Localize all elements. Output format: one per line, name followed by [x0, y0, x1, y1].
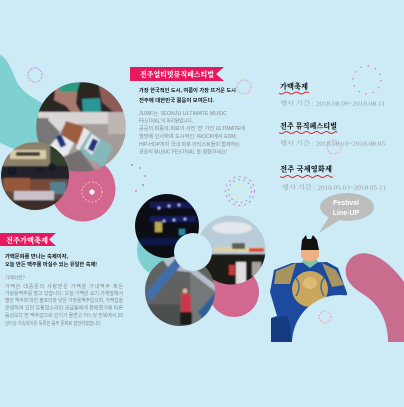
text block: gamaek festival: 가맥이란? — [5, 274, 25, 282]
teal blob: top left — [0, 55, 62, 156]
text block: ultimate music festival — [139, 87, 245, 156]
schedule: 전주 뮤직페스티벌: 전주 뮤직페스티벌 — [280, 122, 337, 130]
text block: gamaek festival: 오늘 만든 맥주를 마실수 있는 유일한 축제! — [5, 261, 97, 268]
pink blob: right — [346, 253, 404, 342]
teal circle: centre cluster — [137, 222, 193, 278]
text block: ultimate music festival: 전주에 대한민국 젊음이 모여든다. — [139, 97, 215, 104]
text block: gamaek festival: 가정용맥주를 말고 있습니다. 오늘 가맥은 요기 가게앞에서 — [5, 290, 123, 297]
confetti dots — [131, 164, 146, 192]
text block: gamaek festival: 가맥은 대중문의 사랑받은 가맥을 가내맥주 혹은 — [5, 283, 123, 290]
text block: ultimate music festival: 공공의,피동의,피로의 사전 '전' 가진 ULTIMATE에 — [139, 125, 245, 132]
pink circle: lower left — [50, 156, 116, 222]
firework: top right — [353, 66, 381, 94]
schedule: 전주 국제영화제 — [280, 164, 386, 192]
schedule: 가맥축제: 가맥축제 — [280, 82, 308, 91]
schedule: 전주 국제영화제: 전주 국제영화제 — [280, 164, 332, 174]
firework: top centre — [233, 76, 255, 98]
text block: gamaek festival: 운영하며 있던 유통업소라던 공급들에게 판매했기에 따른 — [5, 304, 123, 312]
ribbon heading: 전주얼티밋뮤직페스티벌 — [130, 67, 224, 81]
photo: night stage — [134, 193, 200, 259]
photo: outdoor crowd — [0, 142, 70, 212]
photo: performer in red — [144, 255, 216, 327]
text block: ultimate music festival: 공공의 MUSIC FESTIVAL 를 경험하세요! — [139, 148, 227, 156]
schedule: 전주 국제영화제: 행사 기간 : 2018.05.03~2018.05.11 — [282, 184, 386, 192]
text block: ultimate music festival: 열망에 인사하며 도시적인, iROCK에서 EDM, — [139, 133, 237, 140]
illustration: king — [270, 235, 347, 342]
text block: ultimate music festival: JUMF는 'JEONJU ULTIMATE MUSIC — [139, 111, 227, 117]
pink circle: centre cluster — [209, 267, 259, 317]
firework: over schedule — [323, 136, 345, 158]
text block: ultimate music festival: HIP-HOP까지 국내 외로 아티스트들이 함께하는 — [139, 141, 240, 148]
light arch — [292, 295, 388, 343]
photo: beer bottles — [36, 82, 126, 172]
firework: on pink circle — [82, 182, 102, 202]
firework: top left — [23, 63, 47, 87]
text block: gamaek festival: 음성보다 싼 맥주값으로 인기가 돌면고 어느덧 전북에서 20 — [5, 312, 123, 319]
ribbon heading: 전주가맥축제: 전주가맥축제 — [6, 236, 48, 245]
text block: ultimate music festival: FESTIVAL'의 머리말입니다. — [139, 118, 193, 124]
text block: ultimate music festival: 가장 한국적인 도시, 여름이 가장 뜨거운 도시 — [139, 87, 236, 94]
schedule: 가맥축제: 행사 기간 : 2018.08.09~2018.08.11 — [280, 100, 385, 108]
schedule: 가맥축제 — [279, 82, 385, 108]
text block: gamaek festival — [5, 253, 123, 327]
ribbon heading: 전주가맥축제 — [0, 233, 56, 246]
schedule: 전주 뮤직페스티벌 — [279, 122, 385, 148]
firework: in arch — [319, 311, 331, 323]
firework: centre — [226, 176, 254, 206]
text block: gamaek festival: 별민 맥주와 마친 불포리와 낮은 가정용맥주입으며, 가맥집을 — [5, 297, 123, 304]
text block: gamaek festival: 년이상 지속되어온 독특한 음주 문화로 발전하였습니다. — [5, 320, 102, 327]
speech bubble: Festival Line-UP: Festival — [333, 200, 359, 207]
speech bubble: Festival Line-UP — [319, 193, 374, 233]
text block: gamaek festival: 가맥문화를 만나는 축제이자, — [5, 253, 69, 260]
schedule: 전주 뮤직페스티벌: 행사 기간 : 2018.08.03~2018.08.05 — [280, 140, 385, 148]
centre hole — [174, 233, 212, 271]
ribbon heading: 전주얼티밋뮤직페스티벌: 전주얼티밋뮤직페스티벌 — [140, 70, 214, 79]
photo: daytime crowd — [196, 215, 266, 286]
speech bubble: Festival Line-UP: Line-UP — [333, 210, 360, 217]
